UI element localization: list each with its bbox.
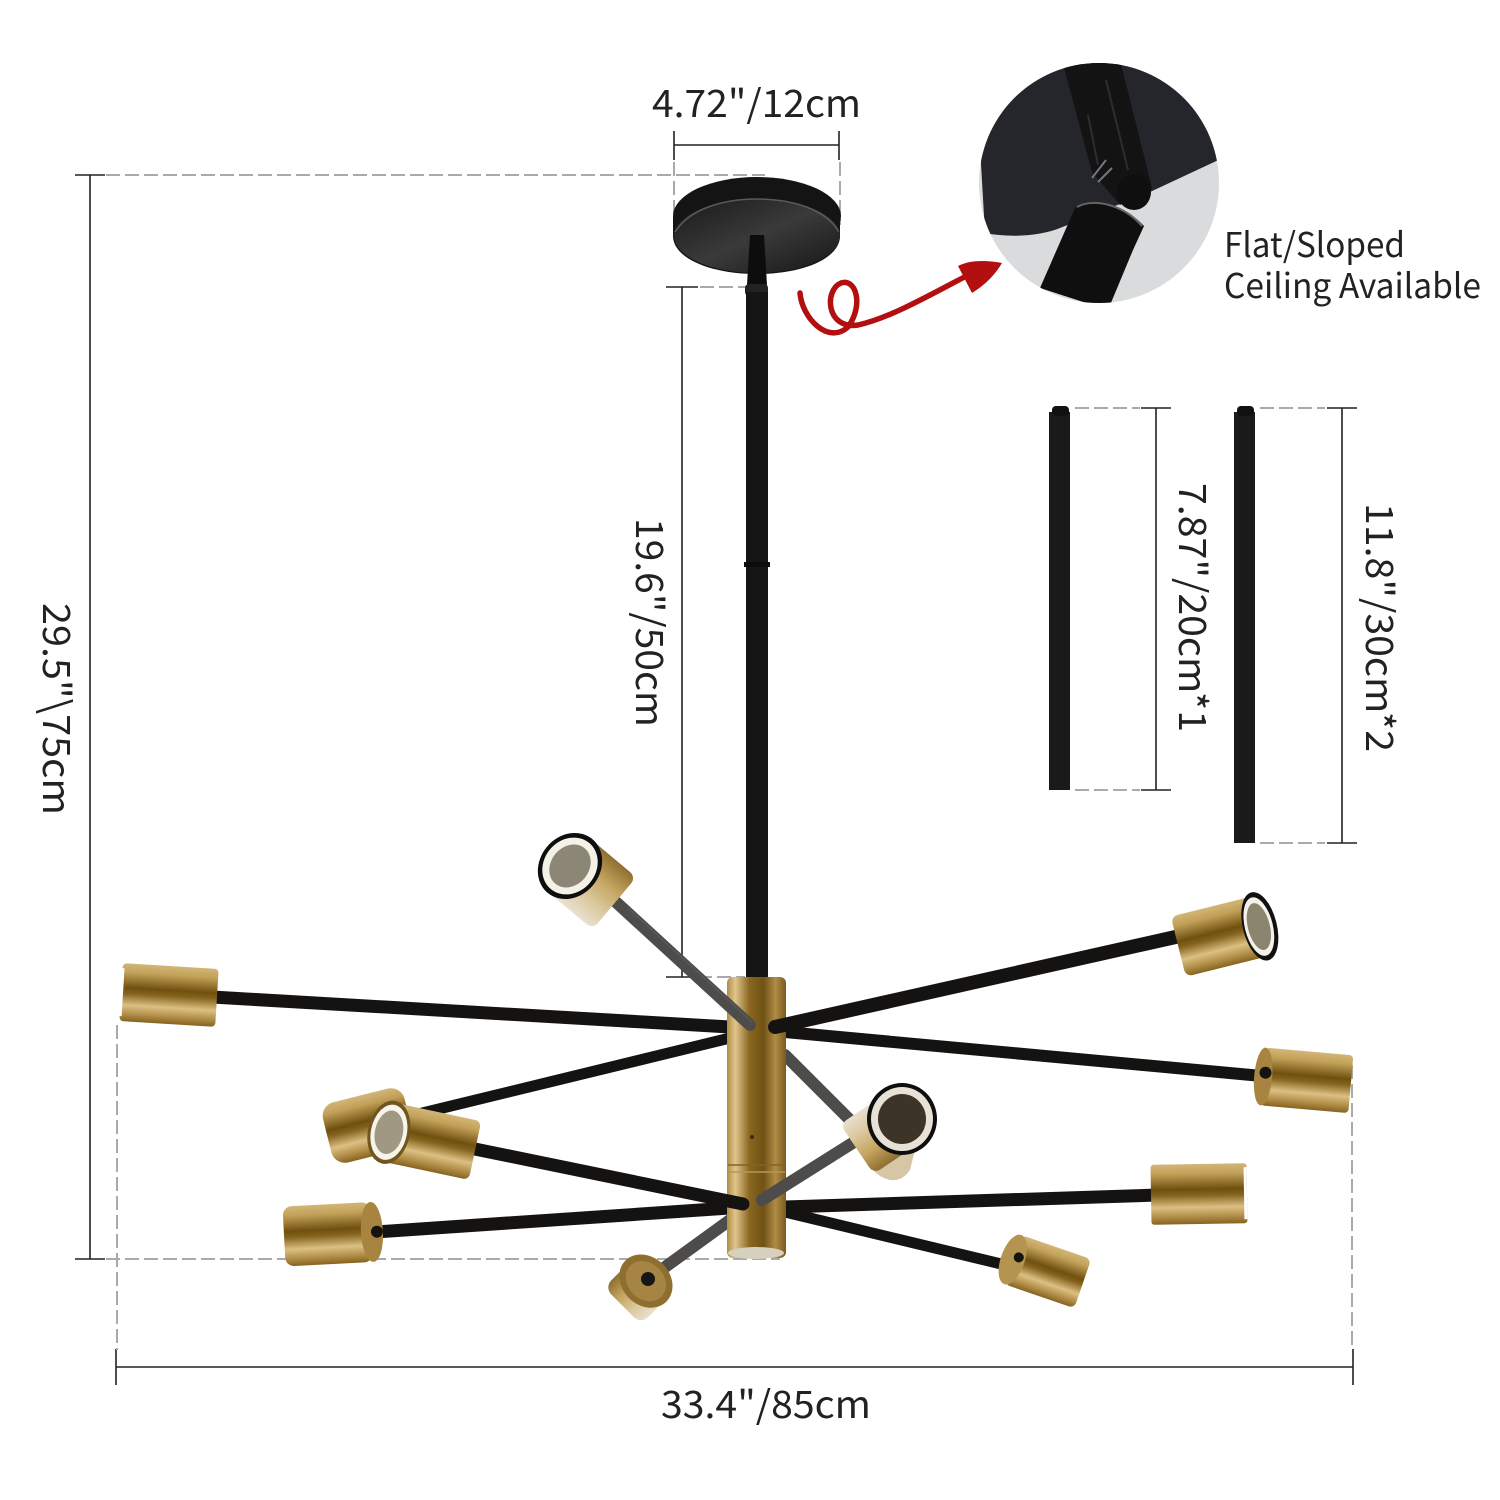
lamp holder: upper right open	[1170, 888, 1285, 981]
lamp holder: lower left	[282, 1201, 385, 1267]
dimension: canopy width 4.72in	[652, 73, 861, 225]
lamp holder: top open	[525, 820, 637, 930]
extension rod 30cm: 11.8"/30cm*2	[1355, 503, 1410, 752]
canopy and stem	[673, 177, 841, 982]
short arm to bottom holder tip	[641, 1272, 655, 1286]
dimension: overall width 33.4in: 33.4"/85cm	[661, 1374, 871, 1429]
extension rod 30cm	[1234, 406, 1410, 843]
lamp holder: center right open	[840, 1083, 937, 1180]
lamp holder: bottom right	[993, 1231, 1091, 1308]
lamp holder: lower right	[1150, 1163, 1248, 1225]
dimension: overall width 33.4in	[116, 1025, 1353, 1429]
caption: flat or sloped ceiling: Ceiling Available	[1224, 259, 1481, 308]
red curly arrow	[800, 261, 1002, 333]
extension rod 20cm: 7.87"/20cm*1	[1168, 483, 1223, 732]
pendant arms	[212, 997, 1262, 1269]
lamp holder: right	[1252, 1047, 1353, 1113]
dimension: canopy width 4.72in: 4.72"/12cm	[652, 73, 861, 128]
dimension: rod length 19.6in	[625, 287, 748, 977]
extension rod 20cm	[1049, 406, 1223, 790]
lamp holder: front left open	[362, 1097, 482, 1182]
caption: flat or sloped ceiling: Flat/Sloped	[1224, 218, 1405, 267]
central brass hub	[727, 977, 786, 1259]
dimension: overall height 29.5in: 29.5"\75cm	[32, 603, 87, 815]
lamp holder: bottom small	[601, 1244, 683, 1326]
rear arms	[410, 1038, 855, 1278]
caption: flat or sloped ceiling	[1224, 218, 1481, 308]
front arms	[470, 892, 1180, 1204]
dimension: rod length 19.6in: 19.6"/50cm	[625, 518, 680, 727]
lamp holder: far left	[118, 963, 219, 1027]
dimension: overall height 29.5in	[32, 175, 780, 1259]
inset photo: sloped ceiling joint	[975, 60, 1225, 310]
lamp holder: rear left	[320, 1085, 416, 1166]
